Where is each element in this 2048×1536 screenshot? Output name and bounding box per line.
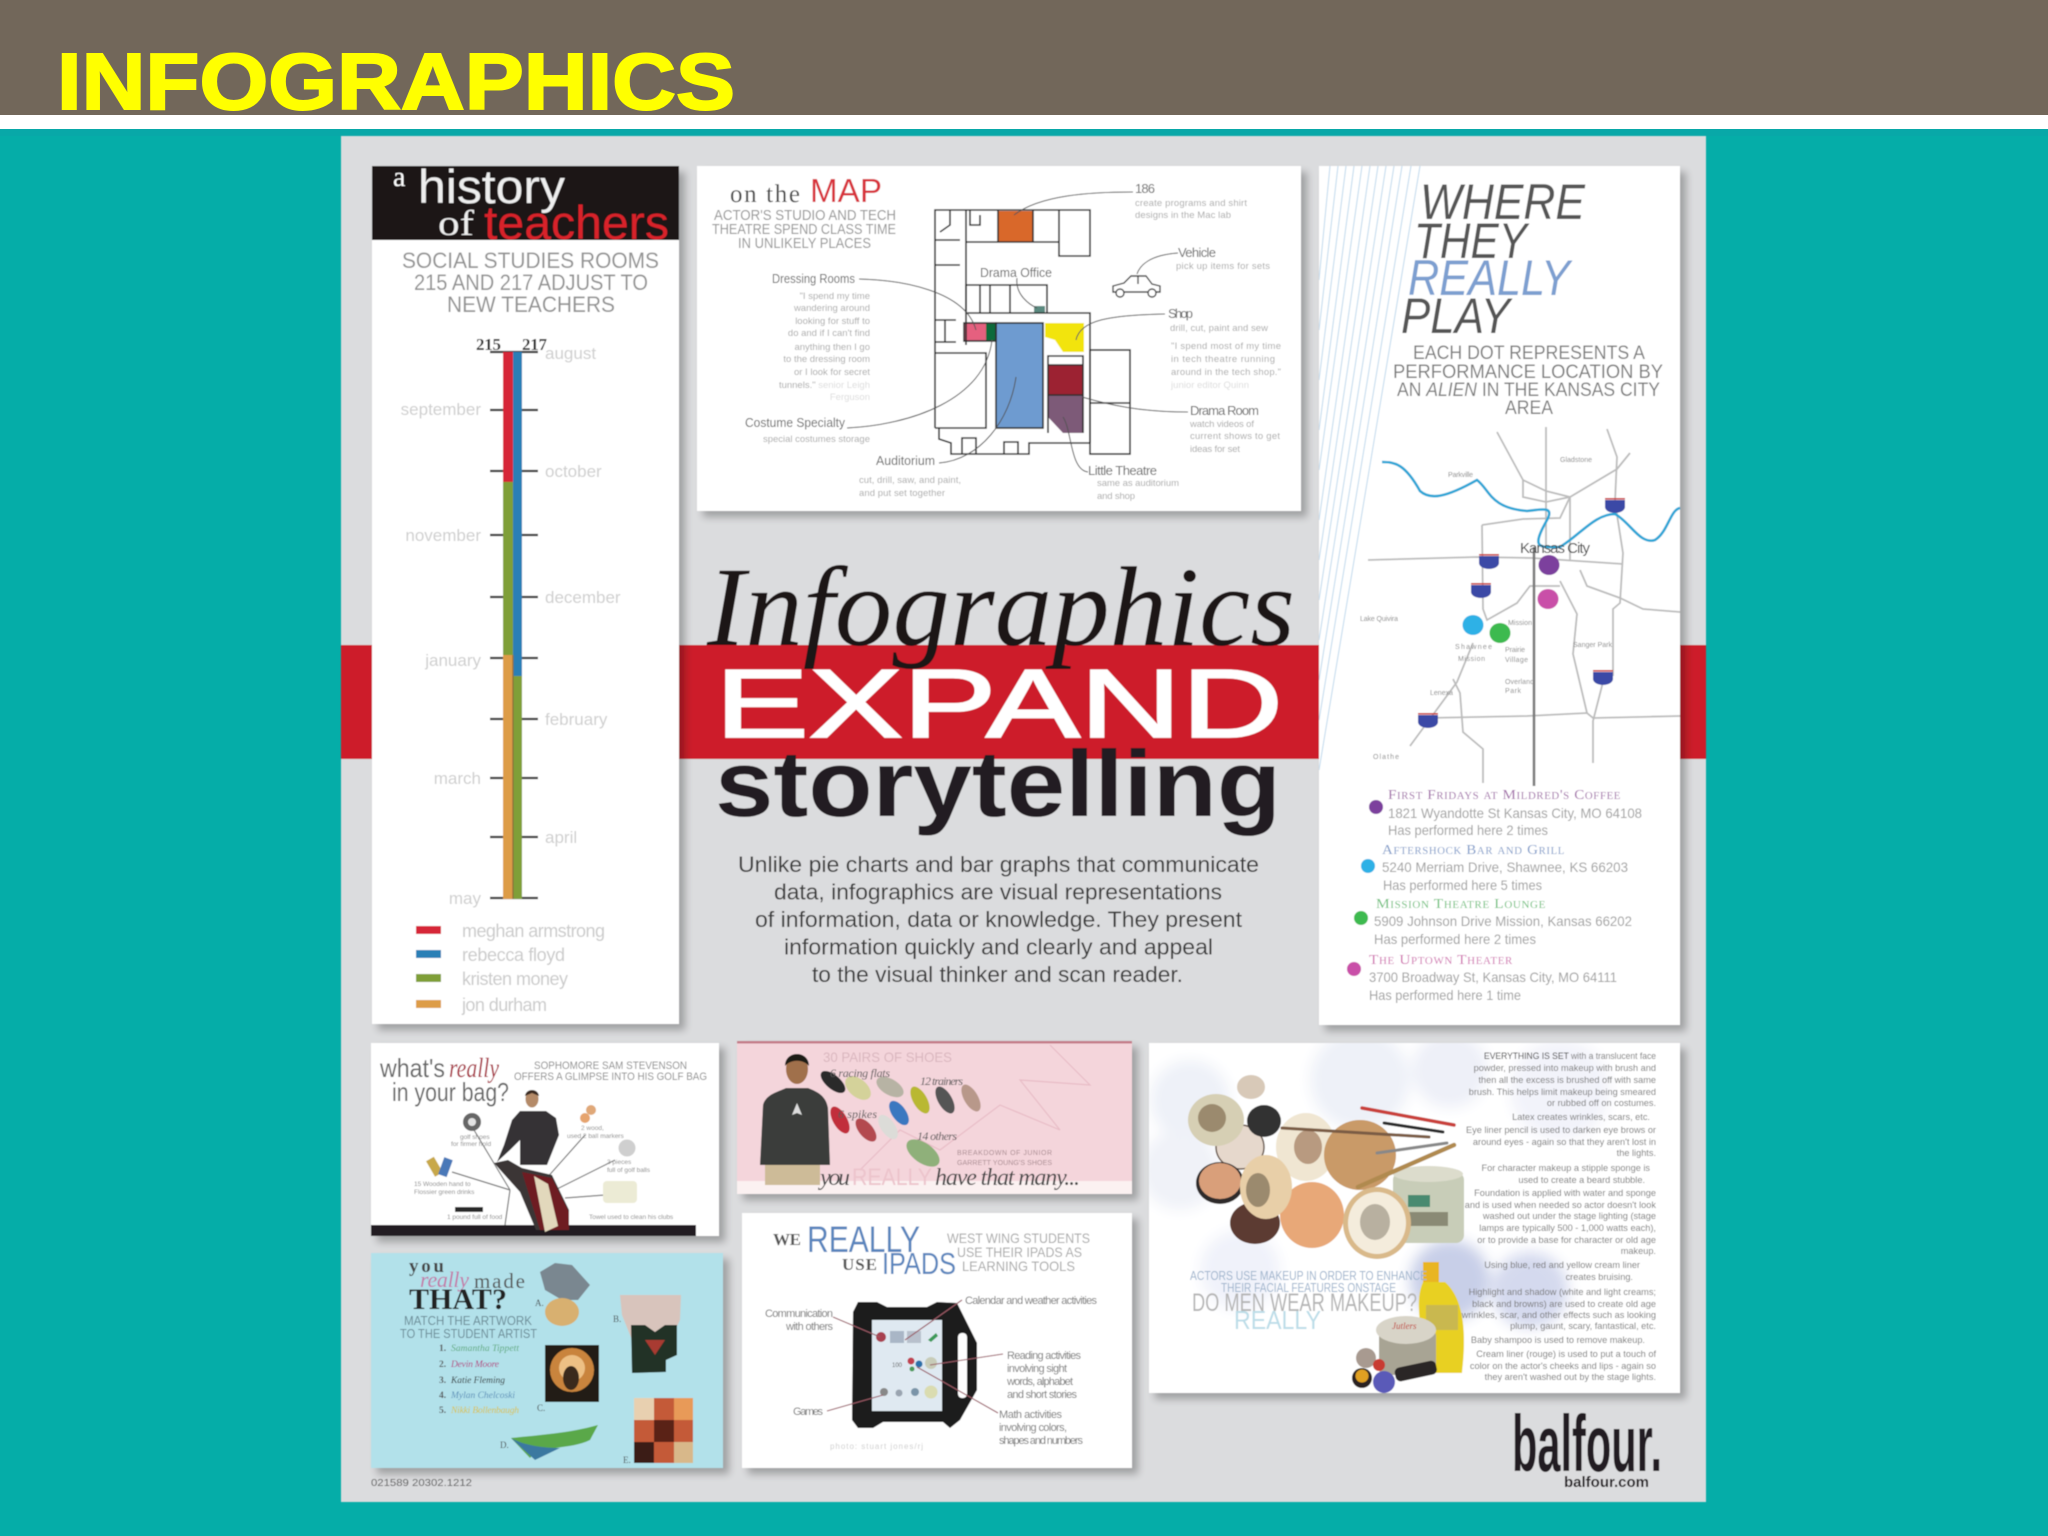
map place names: Prairie <box>1505 647 1525 654</box>
intro paragraph: data, infographics are visual representations <box>774 880 1222 904</box>
ipad heading: LEARNING TOOLS <box>962 1258 1075 1274</box>
makeup heading <box>1190 1268 1427 1335</box>
makeup description text: or to provide a base for character or old age <box>1477 1235 1656 1245</box>
map labels: designs in the Mac lab <box>1135 210 1231 221</box>
shoe captions: BREAKDOWN OF JUNIOR <box>957 1150 1052 1157</box>
map labels: in tech theatre running <box>1171 354 1275 365</box>
map place names: Mission <box>1508 620 1532 627</box>
timeline chart: 215 <box>476 335 501 354</box>
central headline: storytelling <box>715 731 1281 836</box>
balfour logo: balfour. <box>1512 1399 1662 1488</box>
makeup description text: and is used when needed so actor doesn't look <box>1465 1200 1656 1210</box>
map place names: Shawnee <box>1455 644 1492 651</box>
makeup description text: makeup. <box>1621 1246 1656 1256</box>
ipad heading: REALLY <box>807 1219 920 1260</box>
slide title: INFOGRAPHICS <box>57 37 735 126</box>
panel heading: history <box>418 160 566 213</box>
shoe captions: 30 PAIRS OF SHOES <box>823 1049 952 1065</box>
makeup description text: powder, pressed into makeup with brush and <box>1474 1063 1656 1073</box>
map place names: Park <box>1505 688 1522 695</box>
bag captions: Towel used to clean his clubs <box>589 1214 674 1221</box>
icon: ipad: 100 <box>892 1363 903 1369</box>
makeup description text: used to create a beard stubble. <box>1518 1175 1645 1185</box>
map place names: Overland <box>1505 679 1534 686</box>
intro paragraph: Unlike pie charts and bar graphs that communicate <box>738 852 1259 877</box>
map labels: wandering around <box>793 303 870 314</box>
venue list: Has performed here 2 times <box>1388 822 1548 838</box>
balfour logo <box>1512 1399 1662 1491</box>
map place names: Gladstone <box>1560 457 1592 464</box>
map place names <box>1360 457 1612 761</box>
central headline: Infographics <box>706 545 1295 670</box>
where subtitle: AN ALIEN IN THE KANSAS CITY <box>1397 380 1660 401</box>
map heading <box>712 172 896 252</box>
location dots <box>1462 555 1560 643</box>
panel heading <box>371 165 680 241</box>
icon: ipad <box>852 1302 977 1428</box>
red band <box>341 645 1706 759</box>
intro paragraph: of information, data or knowledge. They present <box>755 907 1243 932</box>
artist list: 4. <box>439 1391 446 1401</box>
map labels: watch videos of <box>1189 419 1254 430</box>
makeup description text: Latex creates wrinkles, scars, etc. <box>1512 1112 1650 1122</box>
artist list: 5. <box>439 1406 446 1416</box>
venue list: The Uptown Theater <box>1369 953 1513 968</box>
timeline chart <box>401 335 621 908</box>
venue list: Mission Theatre Lounge <box>1376 897 1546 912</box>
artwork E: E. <box>623 1455 631 1465</box>
bag captions: for firmer hold <box>451 1141 491 1148</box>
makeup heading: THEIR FACIAL FEATURES ONSTAGE <box>1221 1280 1396 1295</box>
ipad heading <box>773 1219 1090 1281</box>
map labels: and put set together <box>859 488 945 499</box>
central headline <box>706 545 1295 836</box>
timeline chart: january <box>424 651 481 670</box>
art heading <box>400 1256 537 1341</box>
map labels: tunnels." senior Leigh <box>779 380 870 391</box>
map place names: Sanger Park <box>1573 642 1612 649</box>
where subtitle: PERFORMANCE LOCATION BY <box>1393 362 1663 383</box>
panel heading: teachers <box>484 196 669 249</box>
ipad heading: USE THEIR IPADS AS <box>957 1244 1082 1260</box>
shoe captions <box>818 1049 1080 1191</box>
shoe captions: have that many... <box>935 1165 1080 1191</box>
makeup description text: plump, gaunt, scary, fantastical, etc. <box>1510 1321 1656 1331</box>
bag captions: used 2 ball markers <box>567 1133 624 1140</box>
artist list: 2. <box>439 1360 446 1370</box>
map labels: to the dressing room <box>783 354 870 365</box>
panel: where they really play <box>1319 166 1686 1031</box>
makeup photo collage: Jutlers <box>1392 1321 1417 1331</box>
map heading: THEATRE SPEND CLASS TIME <box>712 222 896 238</box>
shoe captions: REALLY <box>852 1164 932 1191</box>
makeup description text: the lights. <box>1617 1148 1656 1158</box>
venue list: First Fridays at Mildred's Coffee <box>1388 788 1621 803</box>
panel subtitle: 215 AND 217 ADJUST TO <box>414 270 648 295</box>
map labels: Auditorium <box>876 453 935 468</box>
ipad labels: involving colors, <box>999 1422 1067 1434</box>
makeup description text: then all the excess is brushed off with same <box>1478 1075 1656 1085</box>
makeup heading: ACTORS USE MAKEUP IN ORDER TO ENHANCE <box>1190 1268 1427 1283</box>
poster <box>341 136 1706 1502</box>
venue list: Aftershock Bar and Grill <box>1382 843 1565 858</box>
map labels: looking for stuff to <box>795 316 870 327</box>
map heading: IN UNLIKELY PLACES <box>738 236 871 252</box>
chart legend: meghan armstrong <box>462 921 605 941</box>
map labels: pick up items for sets <box>1176 261 1270 272</box>
artwork C: C. <box>537 1403 545 1413</box>
bag heading <box>379 1053 707 1107</box>
timeline chart: september <box>401 400 481 419</box>
makeup heading: REALLY <box>1234 1305 1321 1335</box>
map labels: Costume Specialty <box>745 415 845 430</box>
makeup description text: wrinkles, scar, and other effects such as looking <box>1461 1310 1656 1320</box>
ipad labels: and short stories <box>1007 1389 1078 1401</box>
map labels: cut, drill, saw, and paint, <box>859 475 961 486</box>
bag captions: golf shoes <box>460 1134 490 1141</box>
map labels: current shows to get <box>1190 431 1280 442</box>
artist list: Mylan Chelcoski <box>450 1391 515 1401</box>
venue list: 5240 Merriam Drive, Shawnee, KS 66203 <box>1382 859 1628 875</box>
map heading: ACTOR'S STUDIO AND TECH <box>714 208 896 224</box>
map place names: Kansas City <box>1520 540 1590 557</box>
where subtitle: AREA <box>1505 398 1553 419</box>
student photo <box>760 1054 830 1185</box>
venue list: 3700 Broadway St, Kansas City, MO 64111 <box>1369 969 1617 985</box>
ipad labels: Reading activities <box>1007 1350 1082 1362</box>
intro paragraph <box>738 852 1259 987</box>
artist list: Katie Fleming <box>450 1376 505 1386</box>
artwork B: B. <box>613 1314 621 1324</box>
kansas city map <box>1360 427 1680 786</box>
print code: 021589 20302.1212 <box>371 1477 472 1489</box>
makeup description text: black and browns) are used to create old age <box>1472 1299 1656 1309</box>
chart legend: jon durham <box>461 995 547 1015</box>
map labels: junior editor Quinn <box>1170 380 1249 391</box>
where subtitle <box>1393 343 1663 419</box>
venue list <box>1347 788 1642 1003</box>
map labels <box>745 181 1281 502</box>
ipad heading: WEST WING STUDENTS <box>947 1230 1090 1246</box>
where heading: PLAY <box>1401 288 1513 344</box>
makeup photo collage <box>1188 1075 1464 1393</box>
shoe captions: 6 racing flats <box>830 1066 890 1080</box>
where subtitle: EACH DOT REPRESENTS A <box>1413 343 1645 364</box>
timeline chart: october <box>545 462 602 481</box>
bag heading: what's <box>379 1053 445 1083</box>
map labels: and shop <box>1097 491 1135 502</box>
shoe captions: you <box>818 1165 850 1191</box>
art heading: MATCH THE ARTWORK <box>404 1313 532 1328</box>
intro paragraph: information quickly and clearly and appeal <box>784 934 1213 960</box>
artwork A: A. <box>535 1298 544 1308</box>
where heading: THEY <box>1414 213 1530 269</box>
timeline chart: february <box>545 710 608 729</box>
intro paragraph: to the visual thinker and scan reader. <box>812 962 1183 987</box>
panel: shoes <box>737 1041 1138 1200</box>
decorative blobs <box>1140 1030 1610 1328</box>
panel heading: a <box>393 162 406 193</box>
artwork D: D. <box>500 1440 509 1450</box>
artwork D <box>500 1425 598 1460</box>
where heading: REALLY <box>1408 250 1573 306</box>
ipad heading: USE <box>842 1255 877 1274</box>
map labels: drill, cut, paint and sew <box>1170 323 1268 334</box>
map labels: or I look for secret <box>794 367 870 378</box>
venue list: Has performed here 1 time <box>1369 987 1521 1003</box>
bag heading: in your bag? <box>392 1077 509 1107</box>
makeup description text: Eye liner pencil is used to darken eye brows or <box>1466 1125 1656 1135</box>
timeline chart: november <box>405 526 481 545</box>
makeup description text: or rubbed off on costumes. <box>1547 1098 1656 1108</box>
header bar <box>0 0 2048 136</box>
map place names: Lake Quivira <box>1360 616 1398 623</box>
icon: car <box>1113 276 1160 297</box>
ipad labels: words, alphabet <box>1006 1376 1073 1388</box>
map leader lines <box>847 192 1188 472</box>
makeup description text: washed out under the stage lighting (stage <box>1482 1211 1656 1221</box>
ipad labels: Games <box>793 1406 824 1418</box>
ipad heading: IPADS <box>882 1246 956 1281</box>
map labels: Ferguson <box>830 392 870 403</box>
bag captions <box>414 1125 674 1221</box>
panel heading: of <box>438 203 474 243</box>
map labels: do and if I can't find <box>788 328 870 339</box>
map labels: same as auditorium <box>1097 478 1179 489</box>
timeline chart: 217 <box>522 335 548 354</box>
ipad heading: WE <box>773 1230 801 1249</box>
map labels: Dressing Rooms <box>772 271 855 286</box>
ipad labels: Calendar and weather activities <box>965 1295 1098 1307</box>
map labels: anything then I go <box>794 342 870 353</box>
artwork C <box>537 1345 599 1413</box>
bag items <box>426 1105 637 1212</box>
ipad labels: Math activities <box>999 1409 1062 1421</box>
artist list <box>439 1344 519 1416</box>
artist list: Devin Moore <box>450 1360 499 1370</box>
bag captions: 1 pound full of food <box>447 1214 503 1221</box>
ipad labels: photo: stuart jones/rj <box>830 1442 923 1451</box>
venue list: Has performed here 2 times <box>1374 931 1536 947</box>
panel: we really use ipads <box>742 1213 1138 1474</box>
makeup description text: For character makeup a stipple sponge is <box>1481 1163 1650 1173</box>
makeup description text: creates bruising. <box>1566 1272 1633 1282</box>
shoe captions: GARRETT YOUNG'S SHOES <box>957 1160 1052 1167</box>
shoe captions: 12 trainers <box>920 1074 963 1088</box>
panel subtitle: NEW TEACHERS <box>447 292 615 317</box>
map labels: Drama Office <box>980 265 1052 280</box>
chart legend <box>416 921 605 1015</box>
chart legend: rebecca floyd <box>462 945 565 965</box>
artwork B <box>613 1295 681 1373</box>
art heading: TO THE STUDENT ARTIST <box>400 1326 537 1341</box>
makeup description text: Foundation is applied with water and sponge <box>1474 1188 1656 1198</box>
ipad labels: shapes and numbers <box>999 1435 1084 1447</box>
makeup description text <box>1461 1051 1656 1382</box>
art heading: made <box>474 1269 525 1293</box>
map heading: on the <box>730 181 800 208</box>
art heading: you <box>409 1256 444 1277</box>
panel: do men wear makeup <box>1140 1030 1686 1399</box>
makeup description text: Using blue, red and yellow cream liner <box>1484 1260 1640 1270</box>
bag heading: OFFERS A GLIMPSE INTO HIS GOLF BAG <box>514 1071 707 1083</box>
central headline: EXPAND <box>715 649 1283 758</box>
panel: on the map <box>697 166 1307 517</box>
balfour logo: balfour.com <box>1564 1474 1649 1491</box>
makeup description text: Baby shampoo is used to remove makeup. <box>1471 1335 1645 1345</box>
panel: what's really in your bag <box>371 1043 725 1242</box>
bag captions: full of golf balls <box>607 1167 651 1174</box>
makeup description text: Cream liner (rouge) is used to put a touch of <box>1476 1349 1656 1359</box>
panel subtitle: SOCIAL STUDIES ROOMS <box>402 248 659 273</box>
map place names: Olathe <box>1373 754 1399 761</box>
panel: you really made that <box>371 1253 729 1474</box>
makeup description text: brush. This helps limit makeup being smeared <box>1469 1087 1656 1097</box>
map labels: Drama Room <box>1190 403 1259 418</box>
map labels: 186 <box>1135 181 1155 196</box>
art heading: really <box>420 1267 469 1292</box>
map heading: MAP <box>810 172 882 209</box>
where heading: WHERE <box>1420 174 1586 230</box>
makeup description text: Highlight and shadow (white and light creams; <box>1469 1287 1656 1297</box>
panel: a history of teachers <box>372 160 685 1030</box>
golfer and bag illustration <box>414 1090 674 1232</box>
shoe captions: 14 others <box>917 1129 957 1143</box>
artist list: 1. <box>439 1344 446 1354</box>
bag captions: 15 Wooden hand to <box>414 1181 471 1188</box>
makeup description text: EVERYTHING IS SET with a translucent face <box>1484 1051 1656 1061</box>
artist list: 3. <box>439 1376 446 1386</box>
chart legend: kristen money <box>462 969 568 989</box>
shoe photos <box>817 1067 985 1172</box>
bag captions: 3 pieces <box>607 1159 632 1166</box>
bag captions: 2 wood, <box>581 1125 604 1132</box>
map place names: Village <box>1505 657 1528 664</box>
makeup description text: they aren't washed out by the stage lights. <box>1485 1372 1656 1382</box>
map labels: around in the tech shop." <box>1171 367 1281 378</box>
artwork E <box>623 1398 693 1465</box>
bag heading: SOPHOMORE SAM STEVENSON <box>534 1060 687 1072</box>
ipad labels: with others <box>785 1321 834 1333</box>
shoe captions: 6 spikes <box>838 1107 877 1121</box>
map labels: Shop <box>1168 306 1193 321</box>
timeline chart: december <box>545 588 621 607</box>
makeup heading: DO MEN WEAR MAKEUP? <box>1192 1289 1417 1317</box>
ipad leader lines <box>827 1300 1003 1413</box>
venue list: 1821 Wyandotte St Kansas City, MO 64108 <box>1388 805 1642 821</box>
makeup description text: lamps are typically 500 - 1,000 watts each), <box>1479 1223 1656 1233</box>
artwork A <box>535 1263 590 1326</box>
ipad labels: involving sight <box>1007 1363 1067 1375</box>
map labels: "I spend my time <box>800 291 870 302</box>
timeline chart: april <box>545 828 577 847</box>
where heading <box>1401 174 1586 344</box>
makeup description text: color on the actor's cheeks and lips - again so <box>1470 1361 1656 1371</box>
map place names: Lenexa <box>1430 690 1453 697</box>
timeline chart: august <box>545 344 596 363</box>
map labels: Little Theatre <box>1088 463 1157 478</box>
floor plan <box>935 210 1130 454</box>
bag heading: really <box>449 1053 499 1083</box>
map labels: create programs and shirt <box>1135 198 1247 209</box>
timeline chart: march <box>434 769 481 788</box>
timeline chart: may <box>449 889 481 908</box>
map labels: ideas for set <box>1190 444 1240 455</box>
panel subtitle <box>402 248 659 317</box>
map labels: Vehicle <box>1178 245 1216 260</box>
ipad labels <box>765 1295 1098 1451</box>
makeup description text: around eyes - again so that they aren't lost in <box>1473 1137 1656 1147</box>
map labels: special costumes storage <box>763 434 870 445</box>
river <box>1382 462 1680 547</box>
artist list: Nikki Bollenbaugh <box>450 1406 519 1416</box>
artist list: Samantha Tippett <box>451 1344 519 1354</box>
art heading: THAT? <box>409 1283 507 1316</box>
map place names: Parkville <box>1448 472 1473 479</box>
ipad labels: Communication <box>765 1308 833 1320</box>
venue list: Has performed here 5 times <box>1383 877 1542 893</box>
bag captions: Flossier green drinks <box>414 1189 475 1196</box>
map labels: "I spend most of my time <box>1171 341 1281 352</box>
map place names: Mission <box>1458 656 1485 663</box>
venue list: 5909 Johnson Drive Mission, Kansas 66202 <box>1374 913 1632 929</box>
highway shields <box>1418 498 1625 728</box>
